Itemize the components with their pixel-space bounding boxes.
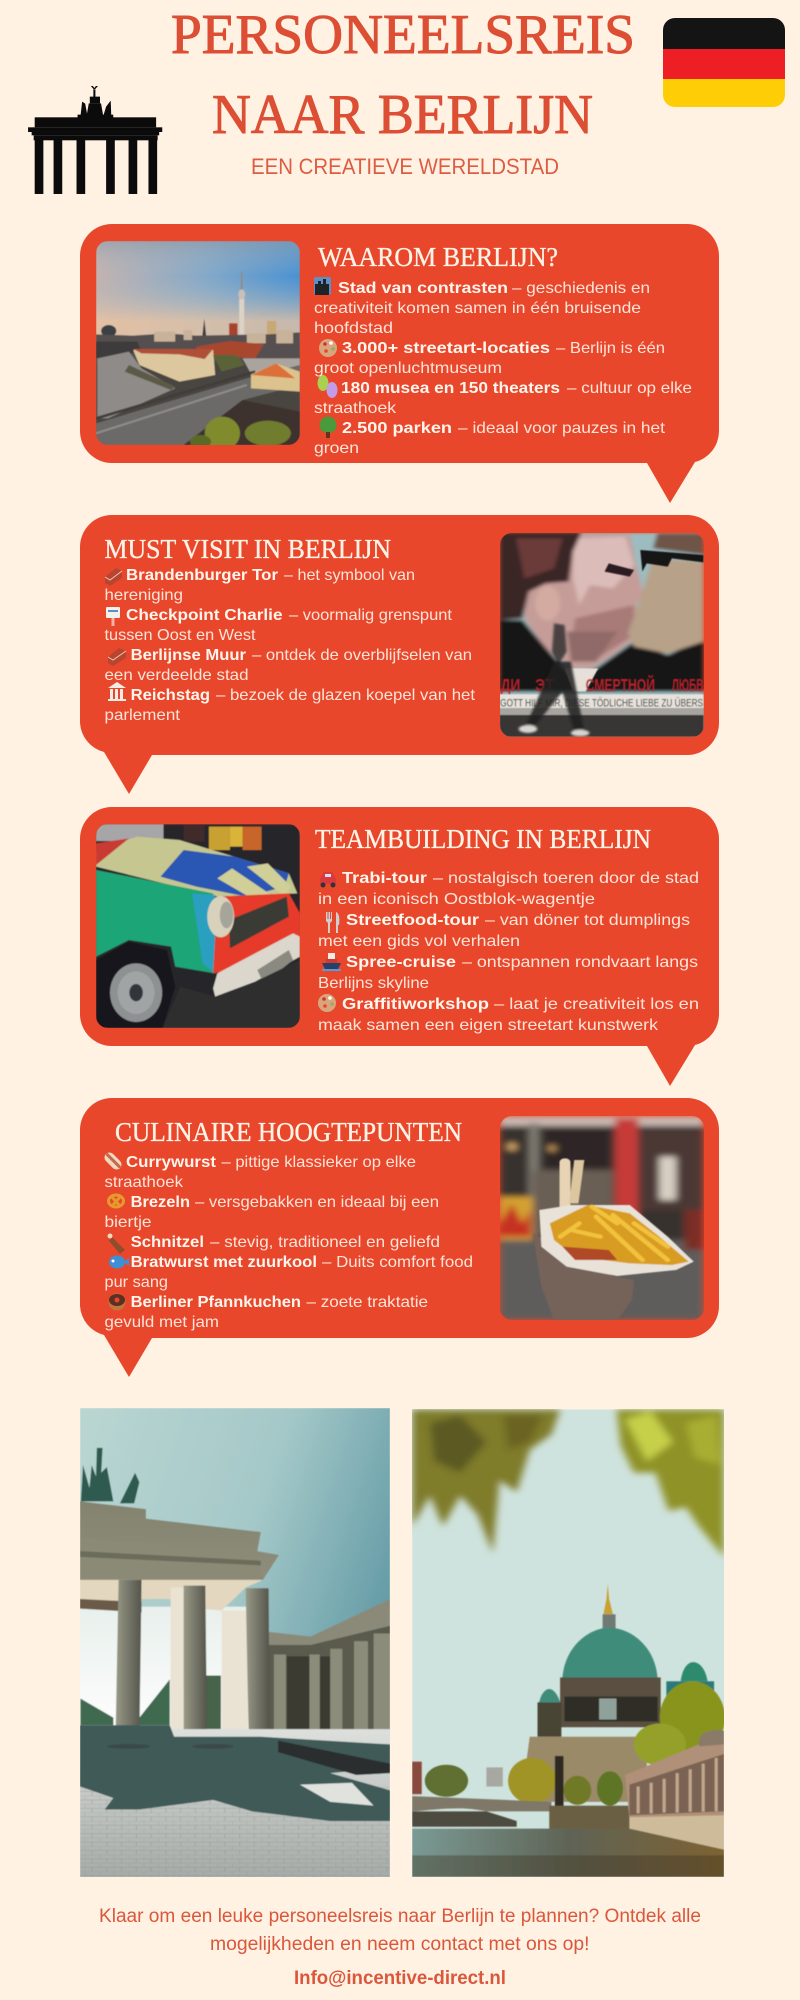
text: teambuilding list: Graffitiworkshop — [342, 996, 489, 1013]
text: food list: straathoek — [104, 1174, 184, 1191]
icon: German flag — [663, 18, 785, 107]
text: teambuilding list — [318, 870, 699, 1034]
text: teambuilding list: Streetfood-tour — [346, 912, 479, 929]
contact email: Info@incentive-direct.nl — [294, 1968, 506, 1989]
text: must-visit list: Brandenburger Tor — [126, 567, 278, 584]
panel: Waarom Berlijn — [80, 224, 719, 503]
icon: brick — [108, 648, 126, 666]
heading: MUST VISIT IN BERLIJN — [104, 534, 391, 564]
text: teambuilding list: – ontspannen rondvaart langs — [462, 954, 698, 971]
text: teambuilding list: met een gids vol verhalen — [318, 933, 520, 950]
text: must-visit list: Berlijnse Muur — [131, 647, 246, 664]
text: reasons list: – Berlijn is één — [556, 340, 665, 357]
photo: Trabant car — [96, 824, 300, 1028]
text: food list: – stevig, traditioneel en geliefd — [210, 1234, 440, 1251]
icon: ship — [322, 953, 341, 971]
text: food list: – pittige klassieker op elke — [222, 1154, 416, 1171]
icon: car — [320, 872, 336, 888]
icon: brick — [105, 568, 122, 586]
title: NAAR BERLIJN — [212, 84, 593, 146]
text: reasons list — [314, 280, 692, 457]
photo: Berlin Wall mural: ДИ — [501, 676, 520, 695]
closing text: mogelijkheden en neem contact met ons op! — [210, 1934, 590, 1955]
photo: Berlin Wall mural: СМЕРТНОЙ — [586, 674, 655, 695]
speech bubble — [80, 1098, 719, 1377]
icon: pretzel — [108, 1195, 124, 1207]
text: food list: – zoete traktatie — [306, 1294, 428, 1311]
heading: WAAROM BERLIJN? — [318, 242, 558, 272]
icon: meat on bone — [108, 1234, 125, 1254]
text: must-visit list: parlement — [104, 707, 181, 724]
text: reasons list: Stad van contrasten — [338, 280, 508, 297]
text: must-visit list: – het symbool van — [284, 567, 415, 584]
panel: Must visit in Berlijn: ЛЮБВ — [672, 676, 703, 695]
text: must-visit list: – voormalig grenspunt — [289, 607, 453, 624]
text: reasons list: groot openluchtmuseum — [314, 360, 502, 377]
photo: Berlin Wall mural — [500, 533, 703, 737]
panel: Must visit in Berlijn — [80, 515, 719, 794]
text: reasons list: 180 musea en 150 theaters — [341, 380, 560, 397]
text: teambuilding list: – laat je creativiteit los en — [494, 996, 699, 1013]
text: food list: – versgebakken en ideaal bij een — [195, 1194, 439, 1211]
text: food list: Brezeln — [131, 1194, 190, 1211]
icon: theater masks — [318, 375, 338, 398]
panel: Teambuilding in Berlijn — [80, 807, 719, 1086]
text: must-visit list: Checkpoint Charlie — [126, 607, 283, 624]
speech bubble — [80, 807, 719, 1086]
text: food list: Bratwurst met zuurkool — [131, 1254, 317, 1271]
photo: currywurst with fries — [500, 1116, 703, 1320]
text: teambuilding list: in een iconisch Oostblok-wagentje — [318, 891, 595, 908]
icon: doughnut — [108, 1294, 126, 1310]
heading: TEAMBUILDING IN BERLIJN — [315, 824, 651, 854]
icon: fish — [109, 1256, 129, 1268]
text: reasons list: groen — [314, 440, 359, 457]
text: reasons list: – cultuur op elke — [567, 380, 692, 397]
text: must-visit list: hereniging — [104, 587, 183, 604]
icon: hot dog — [102, 1150, 124, 1172]
text: food list: pur sang — [104, 1274, 168, 1291]
photo: Brandenburg Gate — [80, 1408, 390, 1877]
text: teambuilding list: Trabi-tour — [342, 870, 427, 887]
text: teambuilding list: Berlijns skyline — [318, 975, 429, 992]
icon: Brandenburg Gate silhouette — [28, 86, 162, 194]
text: food list: gevuld met jam — [104, 1314, 219, 1331]
title — [171, 4, 635, 146]
text: must-visit list: – ontdek de overblijfselen van — [252, 647, 472, 664]
panel: Culinaire hoogtepunten — [80, 1098, 719, 1377]
text: must-visit list: Reichstag — [131, 687, 210, 704]
speech bubble — [80, 224, 719, 503]
text: reasons list: hoofdstad — [314, 320, 393, 337]
subtitle: EEN CREATIEVE WERELDSTAD — [251, 154, 559, 179]
heading: CULINAIRE HOOGTEPUNTEN — [115, 1117, 462, 1147]
text: teambuilding list: Spree-cruise — [346, 954, 456, 971]
text: must-visit list: een verdeelde stad — [104, 667, 248, 684]
closing text: Klaar om een leuke personeelsreis naar Berlijn te plannen? Ontdek alle — [99, 1906, 701, 1927]
icon: classical building — [108, 682, 126, 701]
text: teambuilding list: – nostalgisch toeren door de stad — [433, 870, 699, 887]
text: food list — [104, 1154, 473, 1331]
photo: Berlin Cathedral — [412, 1410, 725, 1877]
text: reasons list: – geschiedenis en — [512, 280, 650, 297]
text: must-visit list — [104, 567, 476, 724]
photo: Berlin Wall mural: ЭТ — [535, 676, 554, 695]
text: teambuilding list: – van döner tot dumplings — [485, 912, 690, 929]
text: reasons list: – ideaal voor pauzes in het — [458, 420, 666, 437]
text: must-visit list: – bezoek de glazen koepel van het — [216, 687, 476, 704]
icon: signpost — [106, 607, 120, 626]
photo: Berlin skyline — [96, 241, 300, 450]
text: reasons list: 3.000+ streetart-locaties — [342, 340, 550, 357]
text: food list: Schnitzel — [131, 1234, 204, 1251]
text: reasons list: straathoek — [314, 400, 397, 417]
text: reasons list: creativiteit komen samen in één bruisende — [314, 300, 641, 317]
icon: fork and knife — [326, 912, 339, 933]
text: food list: Berliner Pfannkuchen — [131, 1294, 301, 1311]
text: food list: biertje — [104, 1214, 152, 1231]
icon: cityscape — [314, 277, 331, 295]
icon: tree — [320, 416, 336, 438]
text: must-visit list: tussen Oost en West — [104, 627, 256, 644]
text: reasons list: 2.500 parken — [342, 420, 452, 437]
title: PERSONEELSREIS — [171, 4, 635, 66]
icon: palette — [318, 994, 336, 1012]
icon: palette — [319, 339, 337, 357]
speech bubble — [80, 515, 719, 794]
closing text — [99, 1906, 701, 1955]
text: food list: Currywurst — [126, 1154, 217, 1171]
text: food list: – Duits comfort food — [322, 1254, 473, 1271]
text: teambuilding list: maak samen een eigen streetart kunstwerk — [318, 1017, 659, 1034]
